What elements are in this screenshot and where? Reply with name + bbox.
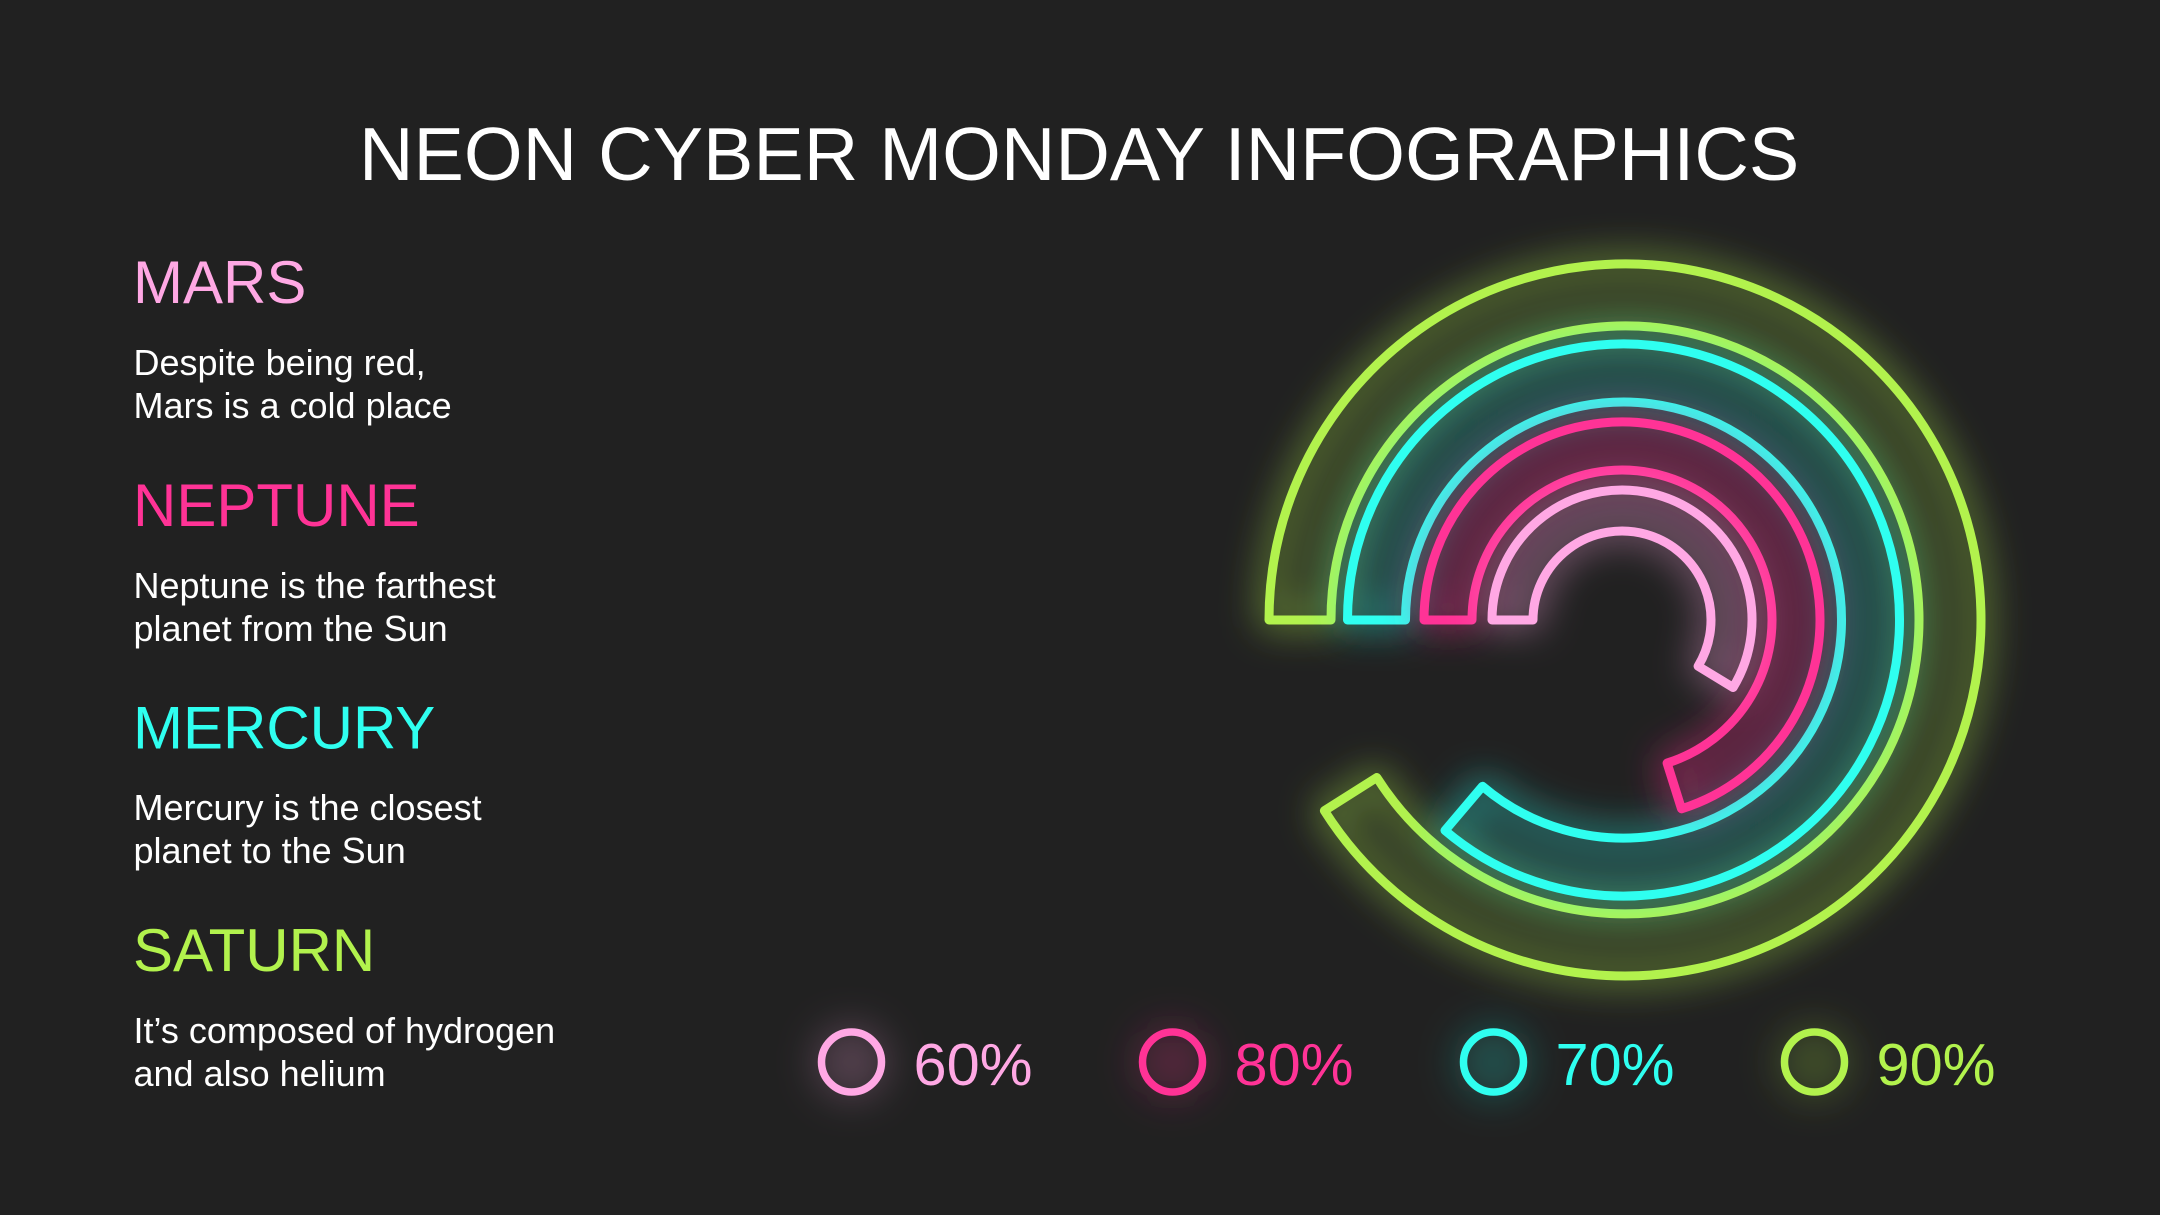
Saturn block: and also helium — [134, 1053, 386, 1094]
Neptune block: planet from the Sun — [134, 608, 448, 649]
Mercury block: Mercury is the closest — [134, 787, 482, 828]
legend item: 80%: 80% — [1234, 1031, 1354, 1098]
ring: Mars 60% — [1492, 490, 1752, 688]
legend item: 60%: 60% — [914, 1031, 1033, 1098]
ring: Mercury 70% — [1348, 344, 1900, 896]
legend item: 70%: 70% — [1556, 1031, 1675, 1098]
Saturn block — [133, 917, 555, 1094]
Neptune block: NEPTUNE — [133, 472, 420, 539]
legend item: 80% — [1142, 1031, 1354, 1098]
radial chart — [1269, 264, 1981, 976]
legend item: 90%: 90% — [1876, 1031, 1996, 1098]
legend — [822, 1031, 1996, 1098]
Mars block: Mars is a cold place — [134, 385, 452, 426]
Saturn block: It’s composed of hydrogen — [134, 1010, 555, 1051]
ring: Saturn 90% — [1269, 264, 1981, 976]
legend item: 90% — [1784, 1031, 1996, 1098]
title: NEON CYBER MONDAY INFOGRAPHICS — [359, 112, 1799, 196]
Mercury block: MERCURY — [133, 694, 435, 762]
Saturn block: SATURN — [133, 917, 375, 984]
Neptune block: Neptune is the farthest — [134, 565, 496, 606]
Mars block: MARS — [133, 249, 306, 316]
Mercury block: planet to the Sun — [134, 830, 406, 871]
Mercury block — [133, 694, 482, 871]
Neptune block — [133, 472, 496, 649]
panel: planet list — [133, 249, 555, 1094]
legend item: 70% — [1464, 1031, 1675, 1098]
Mars block — [133, 249, 452, 426]
Mars block: Despite being red, — [134, 342, 426, 383]
legend item: 60% — [822, 1031, 1033, 1098]
ring: Neptune 80% — [1424, 422, 1820, 809]
